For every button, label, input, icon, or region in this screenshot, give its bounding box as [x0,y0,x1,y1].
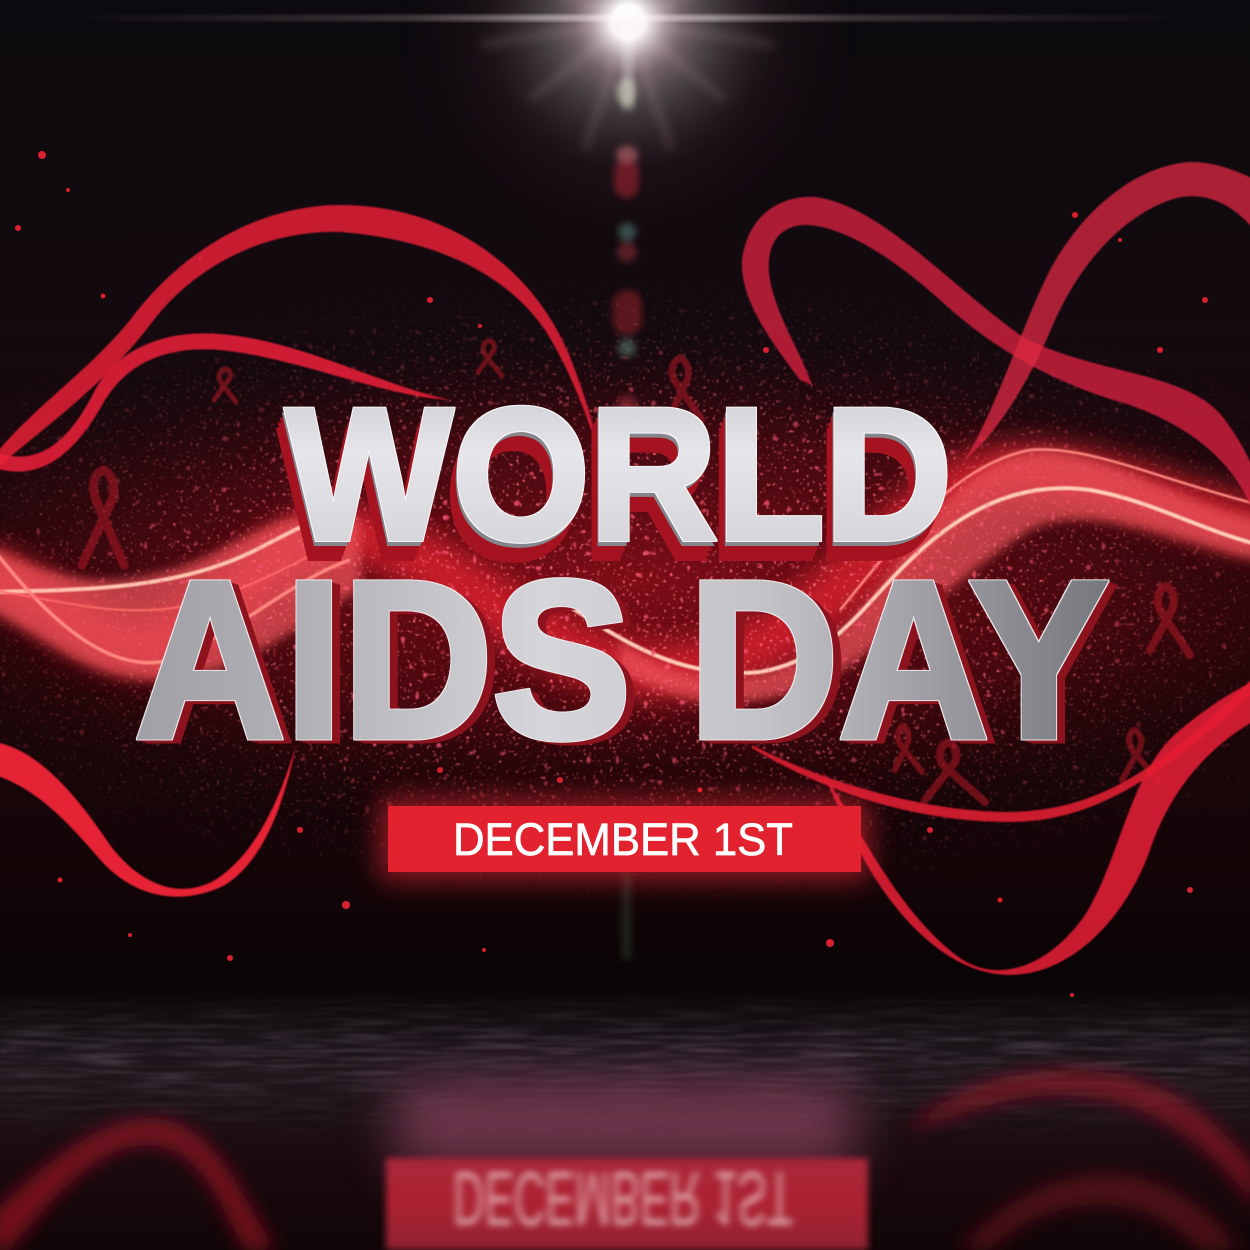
particles: fine speckle [0,284,1250,895]
icon: awareness ribbon centre [668,358,702,420]
ribbon: upper left arc [0,205,607,480]
reflected glow [395,1080,855,1170]
floor reflection [0,1070,1250,1250]
title line: AIDS DAY: AIDS DAY [135,535,1108,785]
reflected date banner [386,1155,868,1250]
lens ghost column [613,78,642,960]
energy wave band [0,450,1250,702]
top horizontal light streak [60,15,1190,21]
icon: awareness ribbon far right [1122,730,1160,782]
date banner glow [380,798,869,880]
floor [0,960,1250,1250]
icon: awareness ribbon centre left [478,341,502,376]
ribbon: bottom right loop [822,680,1250,975]
icon: awareness ribbon upper left [214,369,236,402]
icon: awareness ribbon lower right [925,742,985,802]
lens flare at top [398,0,858,252]
scattered outer particles [15,151,1208,997]
icon: awareness ribbon right [1150,586,1190,655]
ribbon: bottom right sweep [752,675,1250,822]
icon: awareness ribbon left [82,470,124,565]
ghost ribbon icons [82,341,1190,802]
ribbon: right loop [742,197,1250,520]
ribbons [0,162,1250,975]
title [135,369,1108,785]
ribbon: bottom left [0,742,296,897]
ribbon: lower left sweep [0,333,450,472]
back glow of energy waves [0,471,1250,671]
date text: DECEMBER 1ST [453,814,793,865]
ribbon: upper right arc [965,162,1250,460]
reflected date text: DECEMBER 1ST [453,1155,793,1241]
reflected ribbon low right [960,1174,1240,1250]
reflected ribbons left [0,1119,275,1250]
red glow behind title [0,340,1250,820]
reflected ribbons right [905,1070,1250,1210]
icon: awareness ribbon lower centre [895,726,922,772]
date banner [388,806,861,872]
floor texture [0,1006,1250,1120]
particles: large soft speckle [0,287,1250,896]
title line: WORLD: WORLD [286,369,952,579]
